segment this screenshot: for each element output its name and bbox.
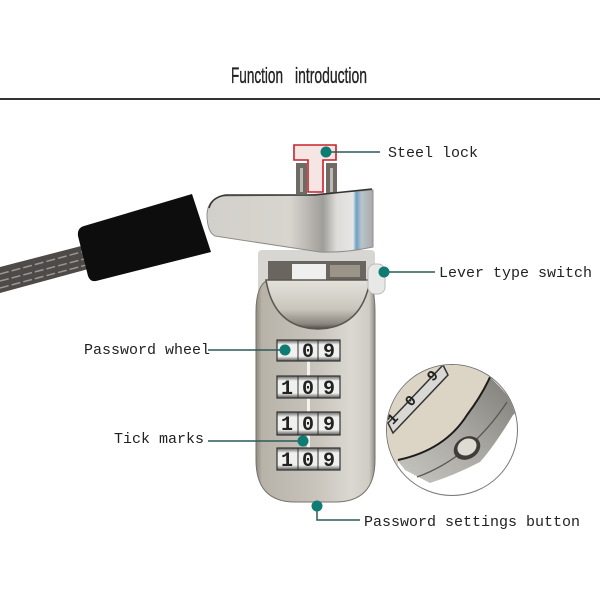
password wheel 2: 0 (302, 378, 314, 401)
callout: password wheel: Password wheel (84, 342, 210, 359)
inset: settings button close-up: 9 (424, 368, 443, 386)
password wheel 3: 9 (323, 414, 335, 437)
password wheel 2: 9 (323, 378, 335, 401)
password wheel 4: 9 (323, 450, 335, 473)
password wheel 1: 0 (302, 341, 314, 364)
connector between wheels (307, 360, 310, 450)
callout: password wheel (84, 342, 290, 359)
infographic canvas (0, 66, 600, 529)
callout: steel lock (320, 145, 478, 162)
black rubber sleeve (78, 194, 211, 281)
password wheel 2 (277, 376, 340, 401)
icon: steel lock T-bar and posts (294, 145, 337, 194)
password wheel 4: 1 (281, 450, 293, 473)
callout: password settings button (312, 500, 580, 531)
title rule (0, 98, 600, 100)
cap top edge highlight (209, 189, 372, 208)
inset: settings button close-up: 1 (384, 411, 403, 429)
password wheel 4: 0 (302, 450, 314, 473)
title (231, 63, 367, 88)
callout: tick marks (114, 431, 308, 448)
lever switch (368, 264, 385, 294)
callout: password settings button: Password settings button (364, 514, 580, 531)
password wheel 3 (277, 412, 340, 437)
chrome dome (266, 280, 370, 329)
lock body (256, 280, 375, 502)
password wheel 1: 9 (323, 341, 335, 364)
inset: settings button close-up (380, 360, 520, 496)
title: introduction (295, 63, 367, 88)
lock neck (258, 250, 375, 300)
callout: lever type switch: Lever type switch (439, 265, 592, 282)
password wheel 3: 1 (281, 414, 293, 437)
top cap (207, 190, 373, 252)
title: Function (231, 63, 283, 88)
cable (0, 245, 92, 293)
inset: settings button close-up: 0 (402, 393, 421, 411)
password wheel 4 (277, 448, 340, 473)
password wheel 3: 0 (302, 414, 314, 437)
callout: steel lock: Steel lock (388, 145, 478, 162)
password wheel 1 (277, 340, 340, 364)
password wheel 2: 1 (281, 378, 293, 401)
callout: tick marks: Tick marks (114, 431, 204, 448)
